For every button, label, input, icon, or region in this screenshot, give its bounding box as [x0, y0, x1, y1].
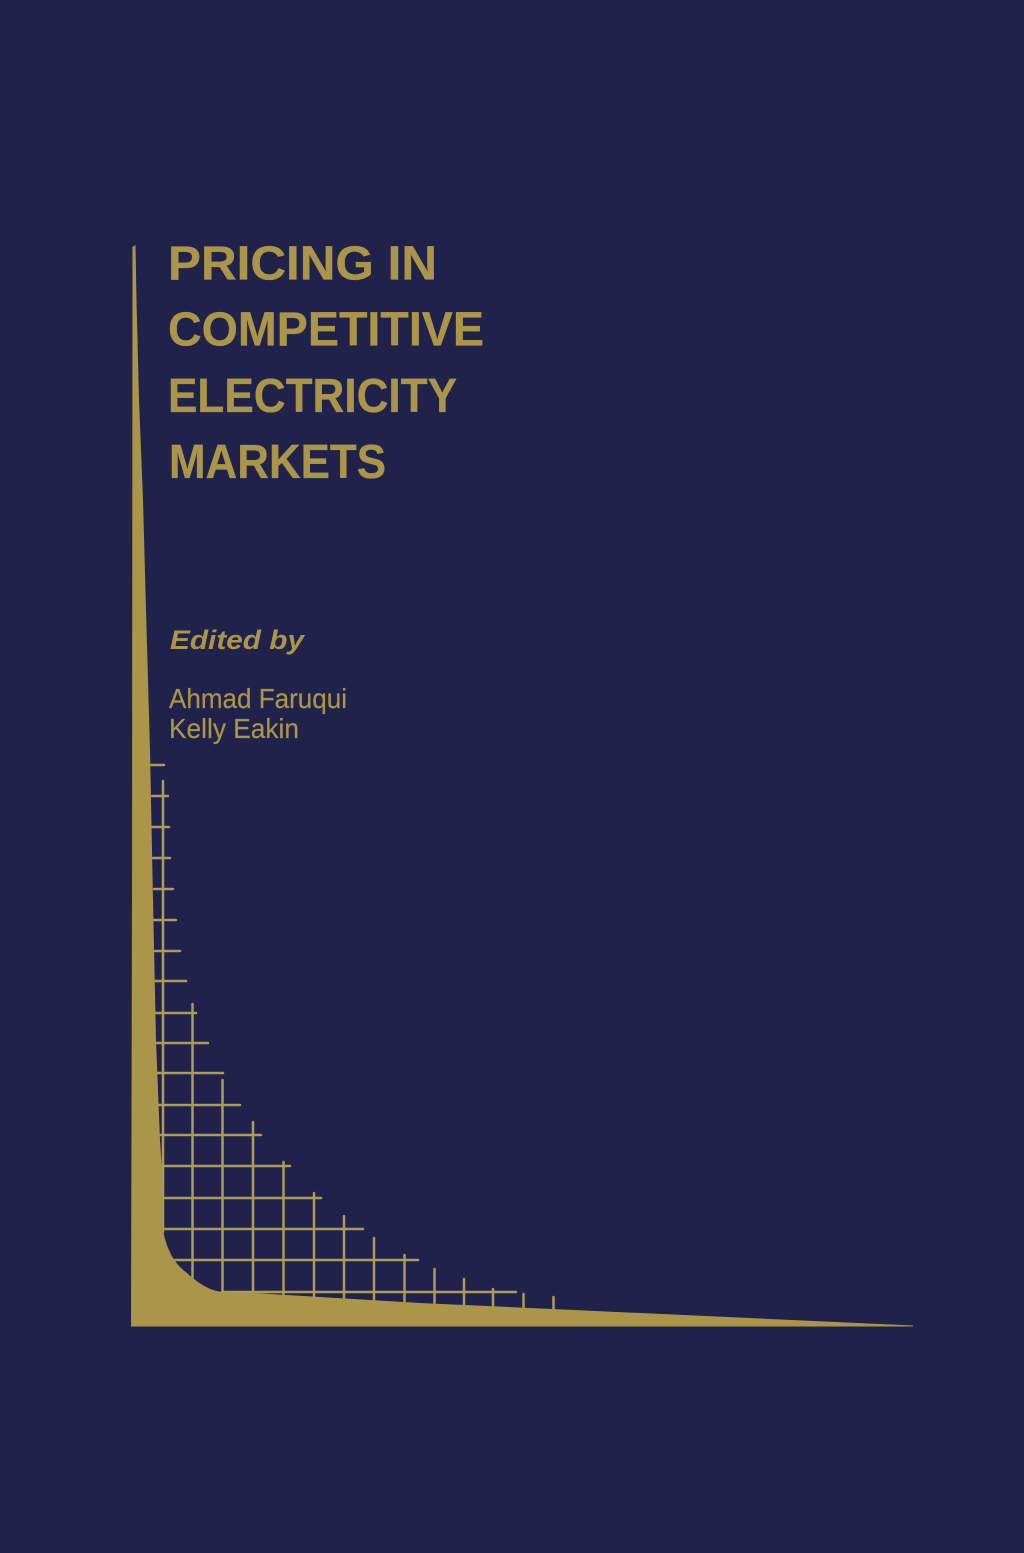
chart: decay curve [131, 245, 913, 1326]
title: MARKETS [169, 436, 386, 489]
editor names: Ahmad Faruqui [169, 683, 347, 714]
title [168, 238, 484, 489]
title: PRICING IN [168, 238, 437, 290]
editor names: Kelly Eakin [169, 713, 299, 744]
title: COMPETITIVE [168, 304, 484, 356]
title: ELECTRICITY [168, 370, 457, 423]
editors label: Edited by [170, 625, 306, 655]
editor names [169, 683, 347, 744]
chart: grid lines [150, 765, 554, 1309]
